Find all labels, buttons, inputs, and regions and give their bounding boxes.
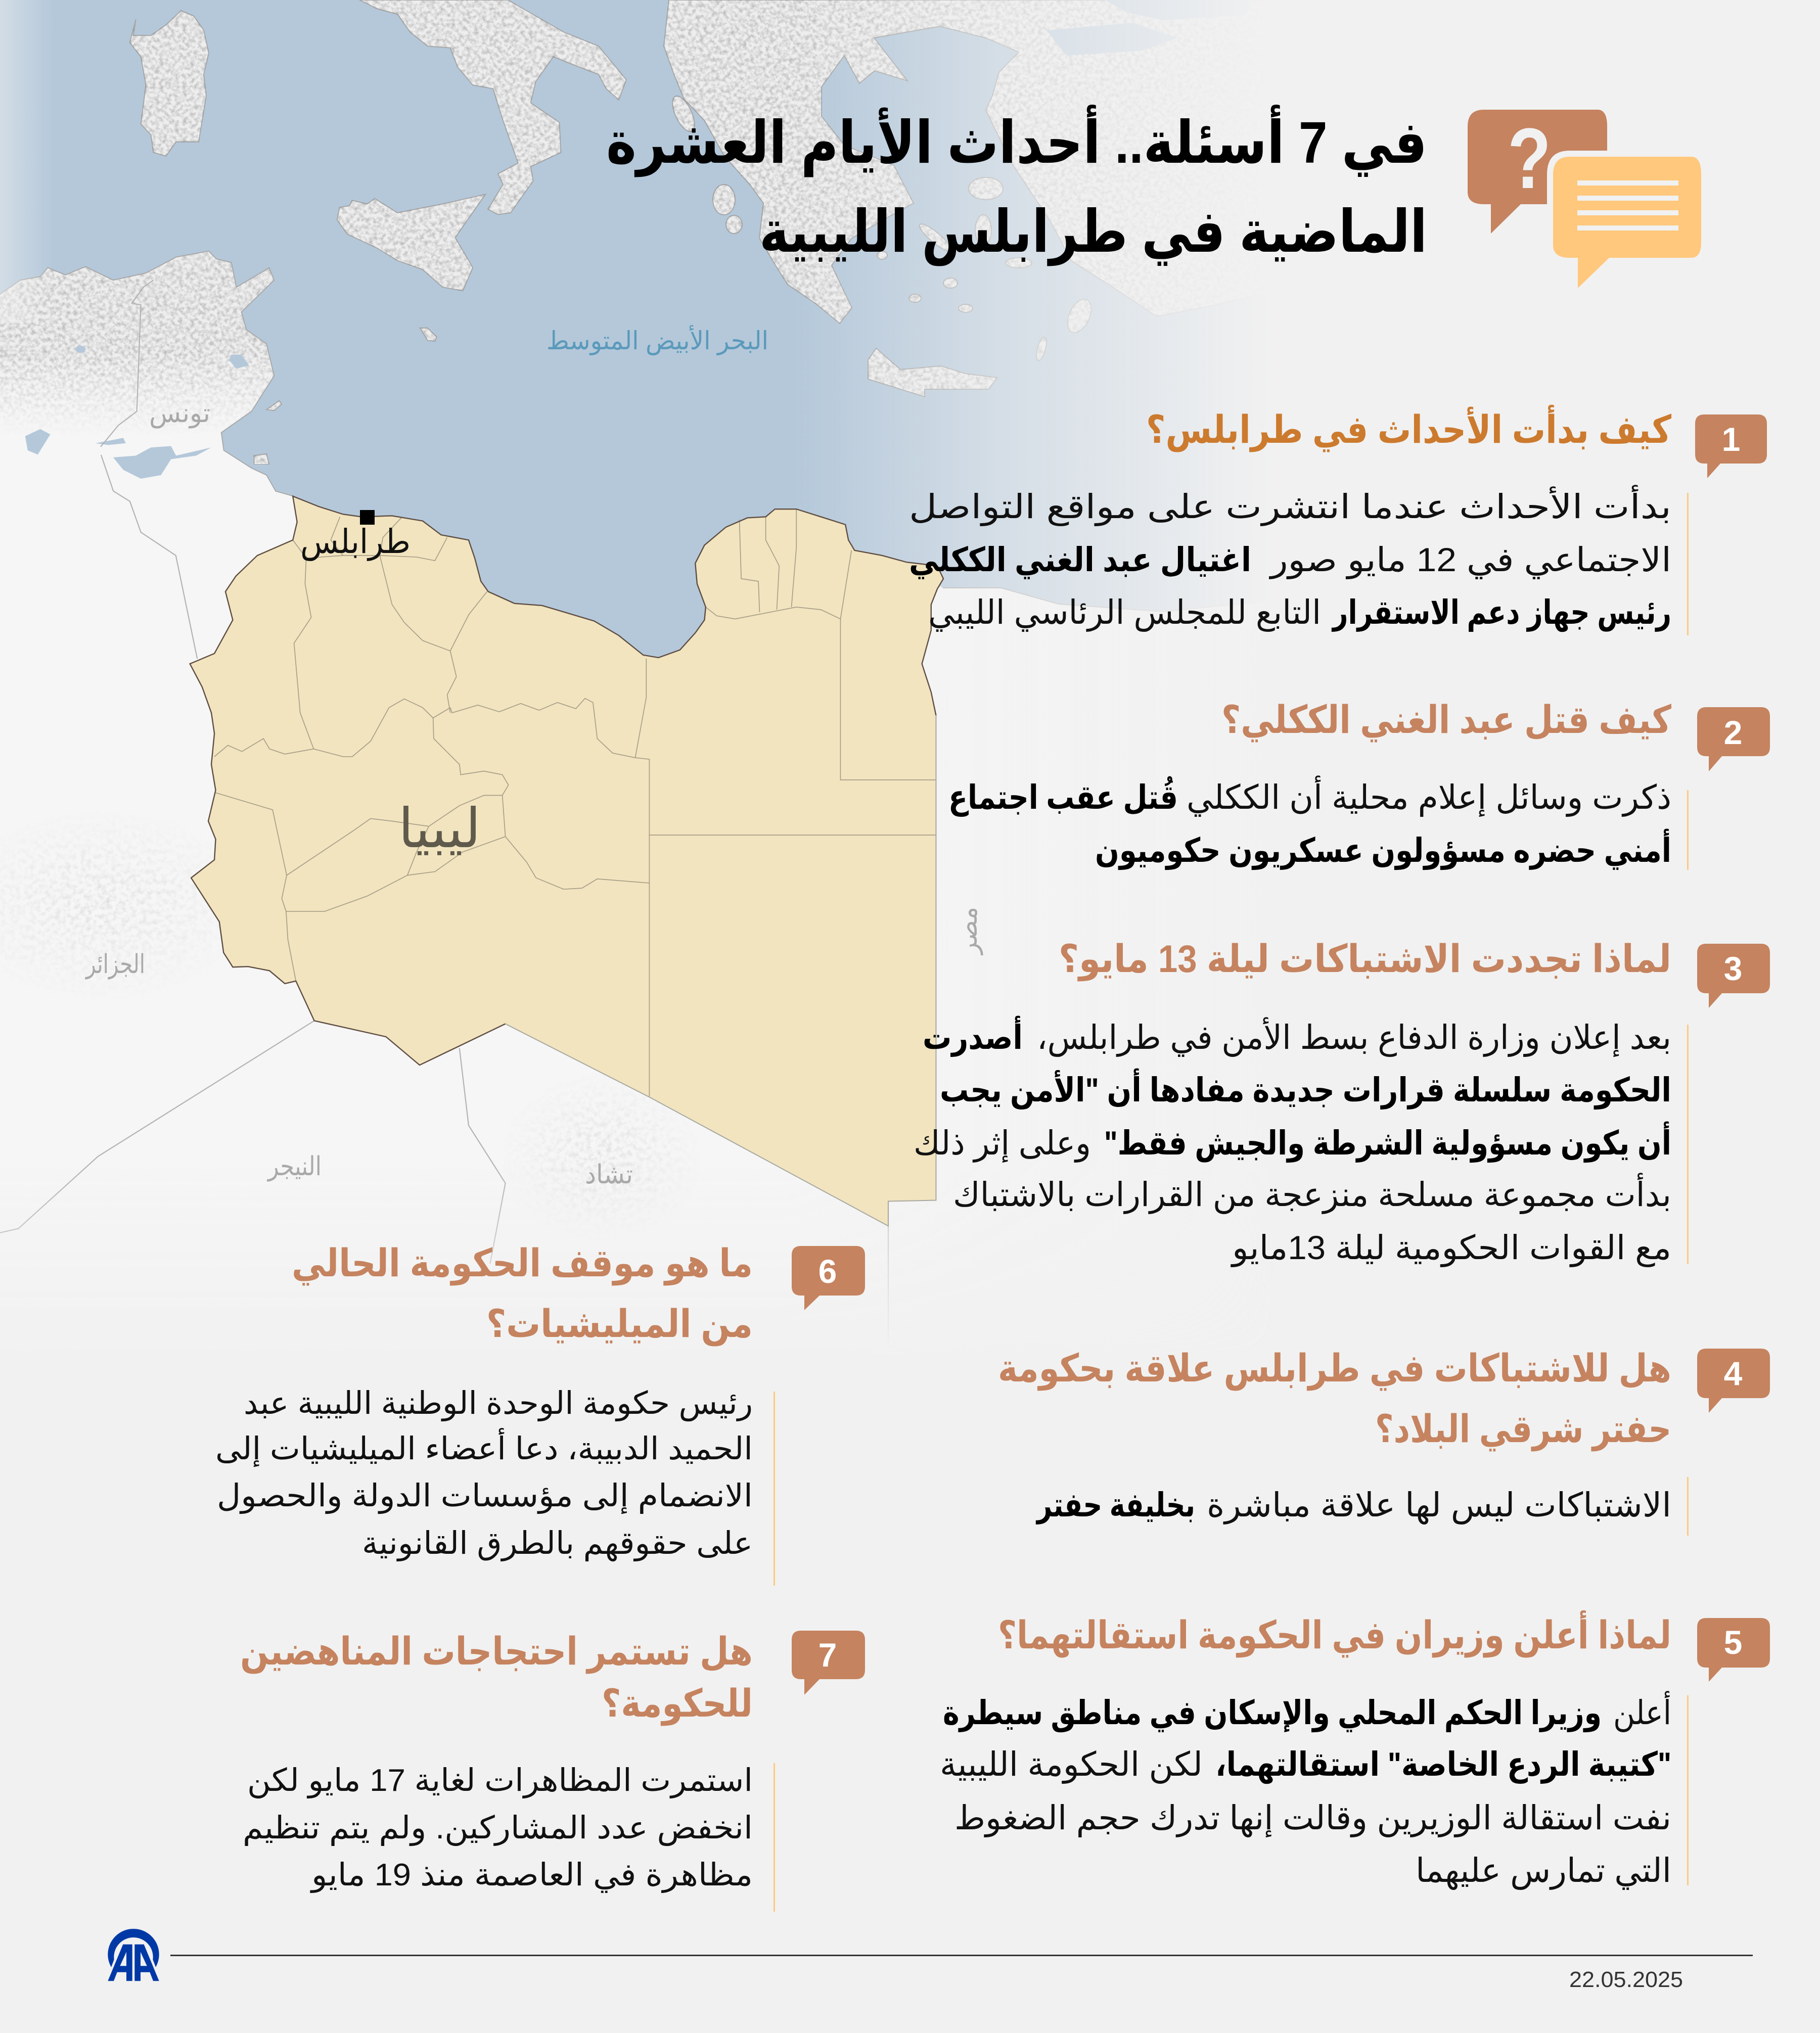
body 1: التابع للمجلس الرئاسي الليبي [928,593,1321,632]
body 3: مع القوات الحكومية ليلة 13مايو [1231,1229,1671,1267]
body 3: أن يكون مسؤولية الشرطة والجيش فقط" [1104,1121,1671,1163]
body 2: قُتل عقب اجتماع [948,776,1178,817]
heading 4 [998,1347,1671,1452]
body 1: رئيس جهاز دعم الاستقرار [1332,593,1671,632]
body 6: الحميد الدبيبة، دعا أعضاء الميليشيات إلى [215,1428,753,1467]
map labels [85,325,983,1189]
body 4: الاشتباكات ليس لها علاقة مباشرة [1207,1486,1671,1524]
body 7: استمرت المظاهرات لغاية 17 مايو لكن [247,1763,753,1798]
body 5 [940,1691,1689,1890]
land: southern plain land [0,251,1820,1418]
badge 7 [792,1631,865,1695]
heading 1: كيف بدأت الأحداث في طرابلس؟ [1146,404,1672,452]
footer line [170,1955,1753,1956]
body 3: بعد إعلان وزارة الدفاع بسط الأمن في طرابلس، [1037,1016,1671,1057]
body 2: أمني حضره مسؤولون عسكريون حكوميون [1095,828,1671,870]
panel: question 2 [948,699,1770,870]
panel: question 3 [914,938,1770,1267]
body 5: لكن الحكومة الليبية [940,1745,1203,1784]
body 7: مظاهرة في العاصمة منذ 19 مايو [310,1858,753,1893]
body 5: "كتيبة الردع الخاصة" استقالتهما، [1215,1745,1671,1784]
body 2 [948,775,1689,870]
lakes [25,0,1254,479]
badge 3 [1697,944,1770,1008]
title [606,104,1427,266]
heading 7 [240,1630,753,1726]
label: Algeria: الجزائر [85,950,145,980]
heading 6: من الميليشيات؟ [486,1303,753,1347]
badge 7: 7 [818,1636,837,1674]
badge 1 [1695,414,1767,478]
Tripoli marker [360,510,375,525]
panel: question 5 [940,1610,1770,1890]
body 6 [215,1386,775,1586]
badge 2 [1697,707,1770,771]
Libya coast and western outline [190,496,943,1065]
label: Libya: ليبيا [398,798,481,859]
icon: question bubble [1468,110,1607,234]
heading 2: كيف قتل عبد الغني الككلي؟ [1221,699,1672,743]
badge 5: 5 [1724,1624,1742,1661]
body 3: بدأت مجموعة مسلحة منزعجة من القرارات بالاشتباك [953,1173,1671,1214]
body 3: وعلى إثر ذلك [914,1124,1091,1163]
badge 6: 6 [818,1253,837,1290]
heading 6: ما هو موقف الحكومة الحالي [292,1242,753,1286]
label: Tripoli: طرابلس [300,523,411,561]
body 3: أصدرت [923,1015,1023,1057]
body 1: بدأت الأحداث عندما انتشرت على مواقع التواصل [909,485,1671,526]
regional boundaries [214,509,936,1097]
heading 4: هل للاشتباكات في طرابلس علاقة بحكومة [998,1347,1671,1391]
body 5: وزيرا الحكم المحلي والإسكان في مناطق سيطرة [943,1694,1602,1733]
Libya fill [190,496,943,1226]
badge 3: 3 [1724,950,1742,987]
sea [0,0,1820,662]
badge 4 [1697,1349,1770,1413]
badge 5 [1697,1618,1770,1682]
heading 7: هل تستمر احتجاجات المناهضين [240,1630,753,1674]
heading 6 [292,1242,753,1347]
badge 2: 2 [1724,714,1742,751]
body 1: اغتيال عبد الغني الككلي [909,541,1251,579]
body 1 [909,485,1689,635]
icon: question mark: ? [1508,111,1551,207]
coastlines of Tunisia and Egypt [0,251,1264,612]
label: Egypt: مصر [953,907,983,956]
heading 5: لماذا أعلن وزيران في الحكومة استقالتهما؟ [998,1610,1671,1658]
heading 7: للحكومة؟ [602,1682,753,1726]
body 6: الانضمام إلى مؤسسات الدولة والحصول [217,1478,753,1514]
panel: question 6 [215,1242,865,1586]
heading 3: لماذا تجددت الاشتباكات ليلة 13 مايو؟ [1059,938,1671,982]
body 4: بخليفة حفتر [1036,1486,1195,1524]
body 5: التي تمارس عليهما [1416,1852,1671,1890]
body 7 [243,1763,775,1912]
badge 4: 4 [1724,1355,1743,1392]
icon: speech bubbles [1468,110,1701,288]
badge 1: 1 [1722,421,1740,458]
body 6: على حقوقهم بالطرق القانونية [362,1526,753,1562]
body 6: رئيس حكومة الوحدة الوطنية الليبية عبد [244,1386,753,1421]
land: desert terrain shading [0,809,703,1243]
body 5: أعلن [1613,1691,1671,1732]
map background [0,0,1820,1456]
map of Libya [190,496,943,1226]
icon: text lines [1577,180,1678,230]
land: northern textured land [0,0,1820,465]
heading 4: حفتر شرقي البلاد؟ [1375,1408,1671,1452]
body 2: ذكرت وسائل إعلام محلية أن الككلي [1187,775,1671,817]
body 7: انخفض عدد المشاركين. ولم يتم تنظيم [243,1811,753,1846]
body 4 [1036,1477,1689,1536]
panel: question 7 [240,1630,865,1912]
AA logo [108,1929,159,1981]
label: Mediterranean Sea: البحر الأبيض المتوسط [547,325,768,355]
icon: answer bubble [1553,157,1701,288]
title: في 7 أسئلة.. أحداث الأيام العشرة [606,104,1427,177]
body 3: الحكومة سلسلة قرارات جديدة مفادها أن "الأمن يجب [940,1068,1671,1110]
label: Niger: النيجر [266,1152,322,1182]
date: 22.05.2025 [1569,1967,1683,1992]
body 3 [914,1015,1689,1267]
title: الماضية في طرابلس الليبية [759,199,1427,266]
label: Tunisia: تونس [149,399,210,429]
panel: question 1 [909,404,1767,635]
Libya eastern border [506,715,936,1226]
international borders [0,280,888,1342]
body 1: الاجتماعي في 12 مايو صور [1269,541,1671,579]
label: Chad: تشاد [585,1160,633,1189]
panel: question 4 [998,1347,1770,1536]
fades [789,0,1820,1415]
body 5: نفت استقالة الوزيرين وقالت إنها تدرك حجم الضغوط [954,1799,1671,1838]
badge 6 [792,1246,865,1310]
